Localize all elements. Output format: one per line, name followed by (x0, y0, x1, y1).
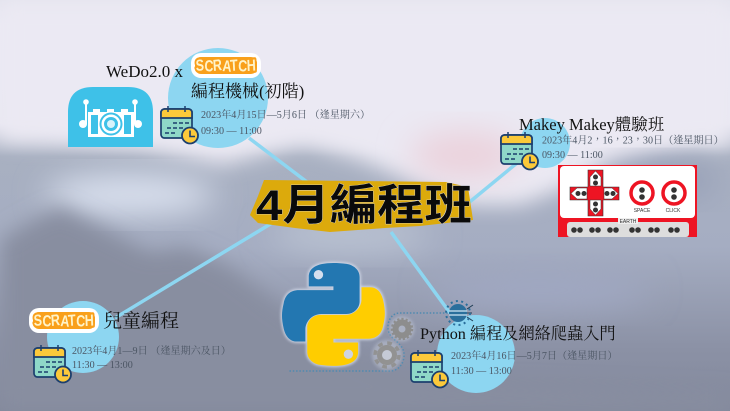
date and time (72, 344, 231, 371)
panel: Python course (282, 263, 618, 393)
connector lines (115, 138, 517, 318)
panel: Scratch children course (29, 301, 231, 382)
icon: calendar clock (411, 350, 448, 388)
icon: WeDo camera robot (68, 87, 153, 147)
heading: 編程機械: 編程機械(初階) (191, 82, 304, 101)
heading: Makey Makey體驗班: Makey Makey體驗班 (519, 115, 665, 134)
date and time (542, 134, 724, 161)
icon: upper gear (390, 316, 414, 342)
date and time: 2023年4月2，16，23，30日（逢星期日） (542, 134, 724, 146)
panel: WeDo Scratch course (68, 48, 370, 148)
date and time: 2023年4月15日—5月6日 （逢星期六） (201, 108, 370, 121)
date and time: 11:30 — 13:00 (72, 360, 133, 371)
date and time: 09:30 — 11:00 (201, 126, 262, 137)
brush stroke highlight (250, 180, 473, 232)
topic circle (47, 301, 119, 373)
title (250, 180, 473, 232)
image: Makey Makey board (558, 165, 697, 237)
heading: 兒童編程: 兒童編程 (103, 310, 179, 332)
topic circle (520, 118, 570, 168)
panel: Makey Makey course (501, 115, 724, 237)
date and time: 2023年4月1—9日 （逢星期六及日） (72, 344, 231, 357)
title text: 4月編程班 (256, 182, 472, 230)
icon: Scratch logo (191, 53, 261, 78)
icon: calendar clock (501, 132, 538, 170)
heading: Python 編程及網絡爬蟲入門: Python 編程及網絡爬蟲入門 (420, 325, 616, 343)
icon: bug (446, 301, 473, 325)
icon: calendar clock (34, 345, 71, 382)
topic circle (437, 315, 515, 393)
icon: lower gear (372, 340, 402, 370)
icon: calendar clock (161, 106, 198, 144)
date and time (451, 349, 618, 377)
dotted pipeline (288, 313, 451, 371)
image: Makey Makey board: CLICK (666, 208, 681, 214)
image: Makey Makey board: SPACE (634, 208, 651, 214)
icon: Python logo (282, 263, 385, 366)
icon: Scratch logo (29, 308, 99, 333)
date and time: 11:30 — 13:00 (451, 366, 512, 377)
date and time: 2023年4月16日—5月7日（逢星期日） (451, 349, 618, 362)
date and time (201, 108, 370, 137)
topic circle (168, 48, 268, 148)
image: Makey Makey board: EARTH (620, 219, 637, 225)
date and time: 09:30 — 11:00 (542, 150, 603, 161)
heading: WeDo2.0 x: WeDo2.0 x (106, 62, 184, 81)
